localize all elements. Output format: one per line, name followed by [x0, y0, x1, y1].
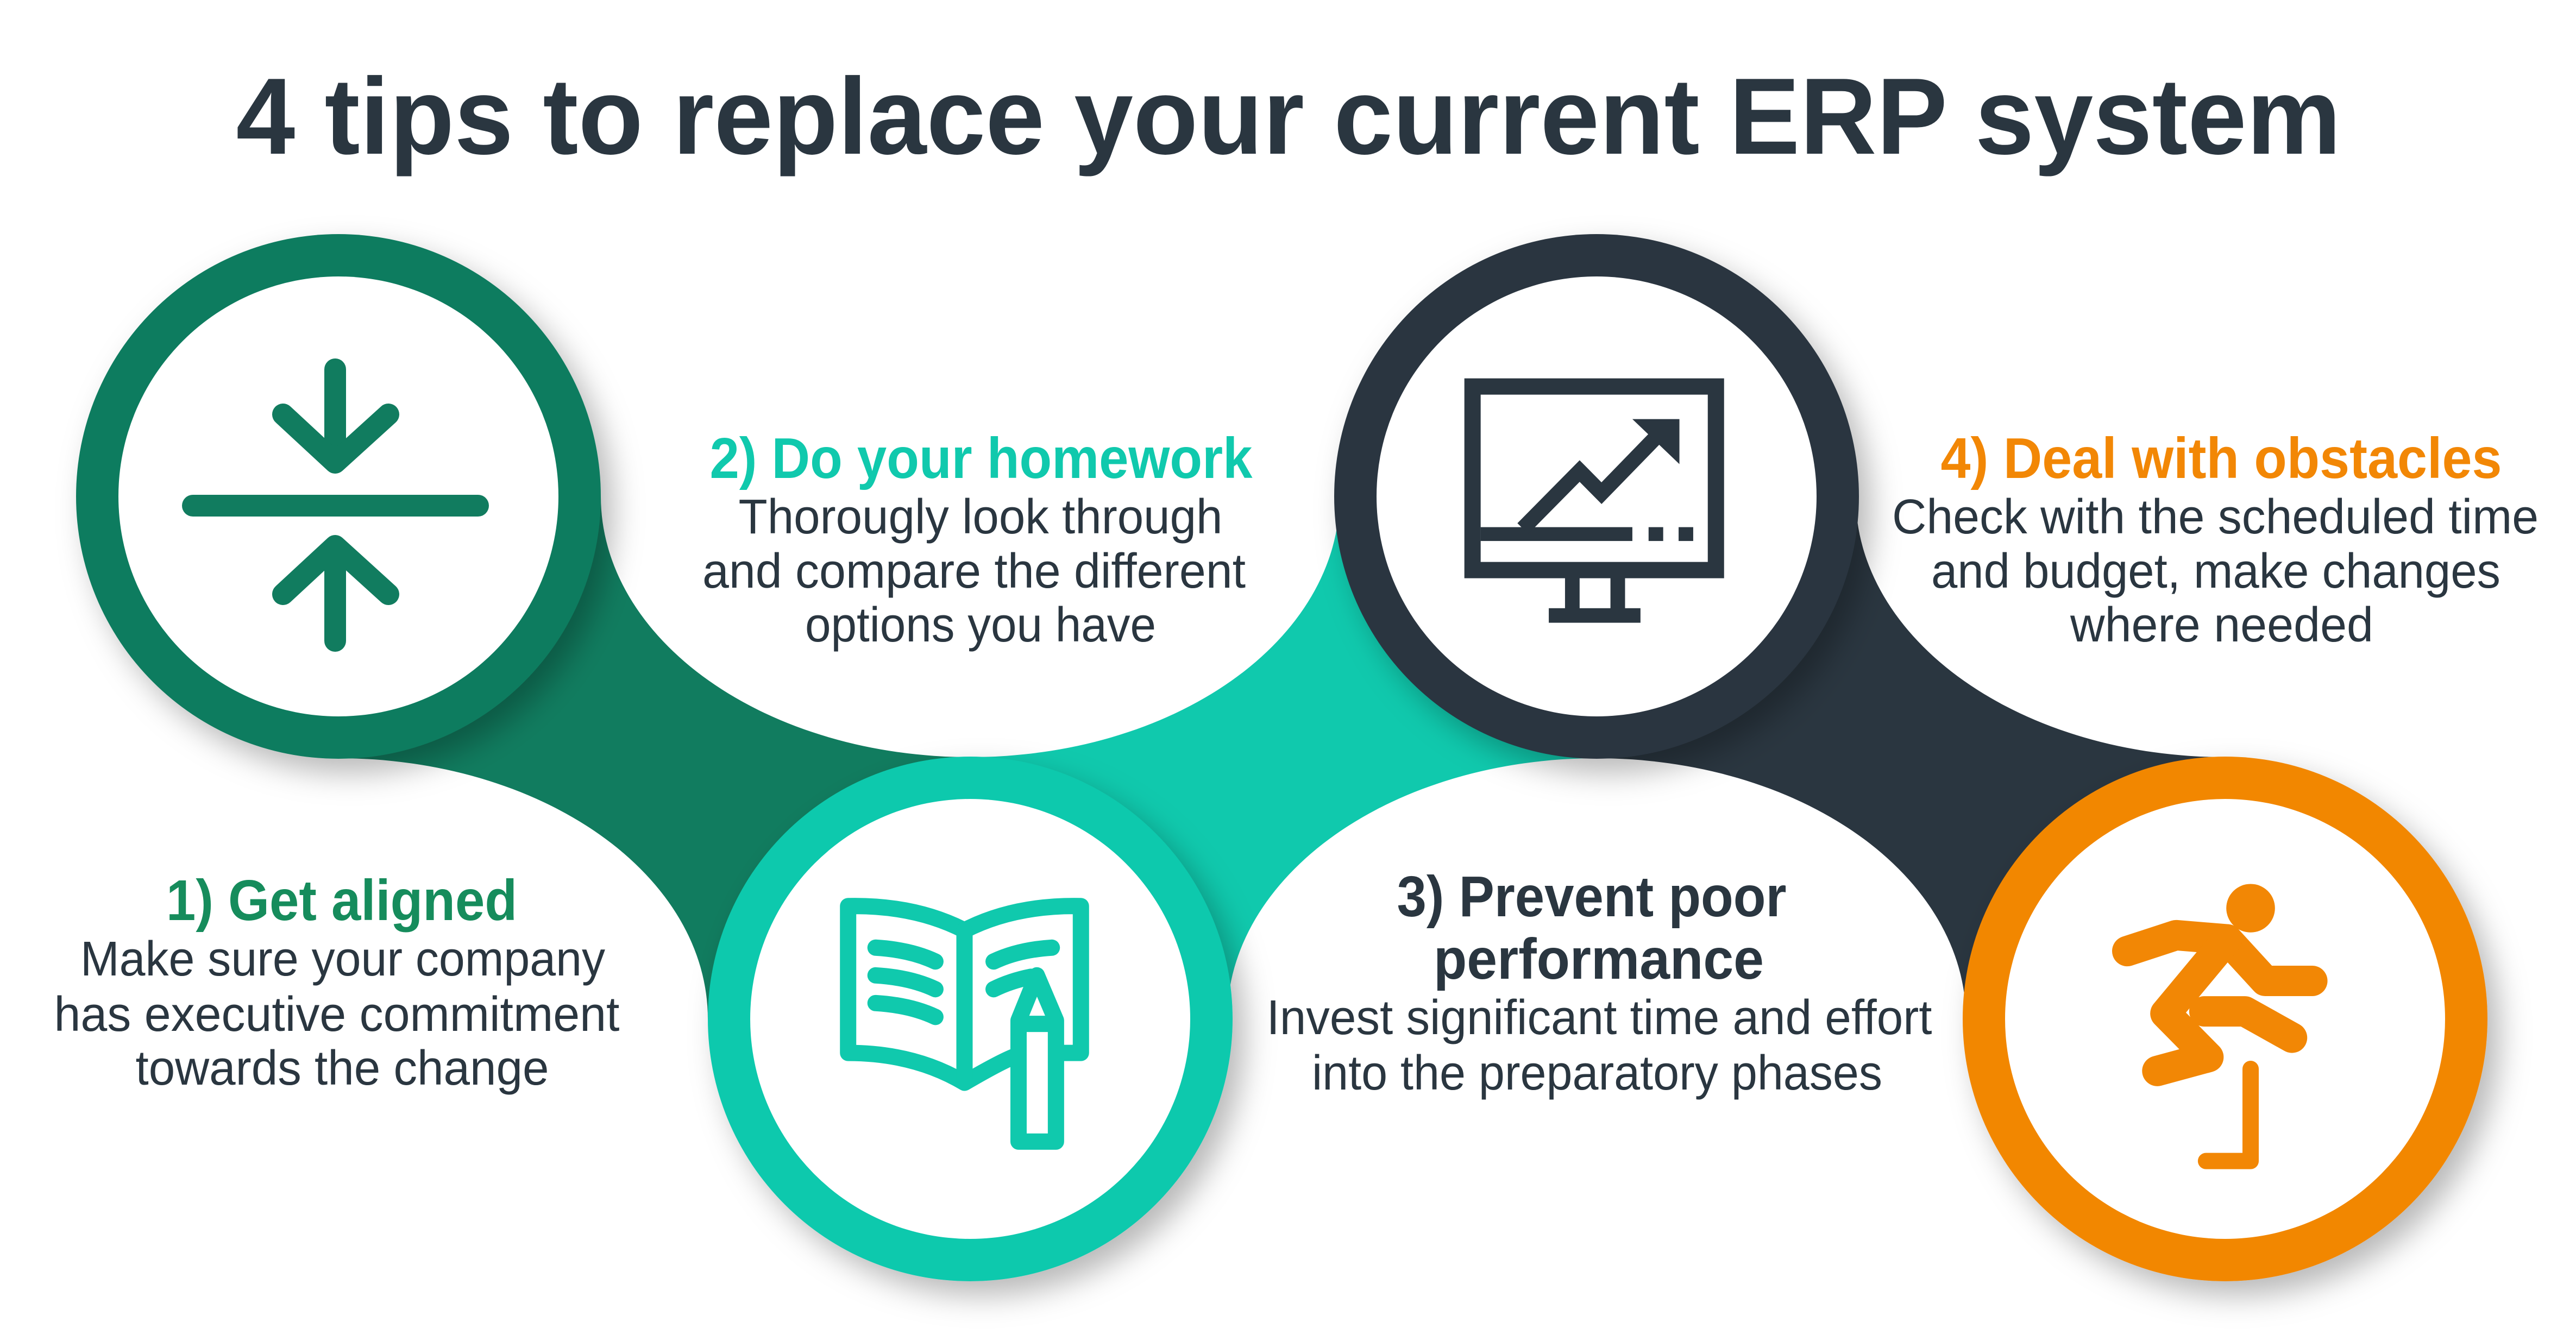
text block 3: 3) Prevent poor [1397, 865, 1786, 929]
text block 1: towards the change [136, 1041, 549, 1096]
circle 1 [76, 234, 601, 759]
icon: monitor with rising chart [1473, 387, 1716, 623]
circle 3 [1334, 234, 1859, 759]
circle 4 [1963, 757, 2487, 1281]
title: 4 tips to replace your current ERP system [236, 56, 2341, 177]
connecting band [0, 236, 2576, 1280]
text block 1 [54, 868, 619, 1096]
text block 1: has executive commitment [54, 987, 619, 1042]
text block 2 [702, 426, 1253, 652]
text block 2: 2) Do your homework [709, 426, 1253, 490]
text block 4: where needed [2070, 598, 2373, 652]
text block 3 [1267, 865, 1932, 1100]
circle 2 [708, 757, 1233, 1281]
icon: book and pencil [848, 906, 1081, 1142]
icon: compress arrows [193, 369, 478, 641]
text block 3: performance [1434, 927, 1764, 991]
text block 4: 4) Deal with obstacles [1940, 426, 2502, 490]
text block 1: 1) Get aligned [166, 868, 517, 933]
text block 3: into the preparatory phases [1312, 1046, 1882, 1100]
icon: runner jumping hurdle [2127, 884, 2313, 1161]
text block 2: and compare the different [702, 544, 1246, 599]
text block 2: options you have [805, 598, 1156, 652]
text block 2: Thorougly look through [739, 490, 1222, 544]
text block 3: Invest significant time and effort [1267, 991, 1932, 1045]
text block 4: and budget, make changes [1931, 544, 2500, 599]
text block 1: Make sure your company [80, 932, 605, 986]
text block 4: Check with the scheduled time [1892, 490, 2539, 544]
text block 4 [1892, 426, 2539, 652]
